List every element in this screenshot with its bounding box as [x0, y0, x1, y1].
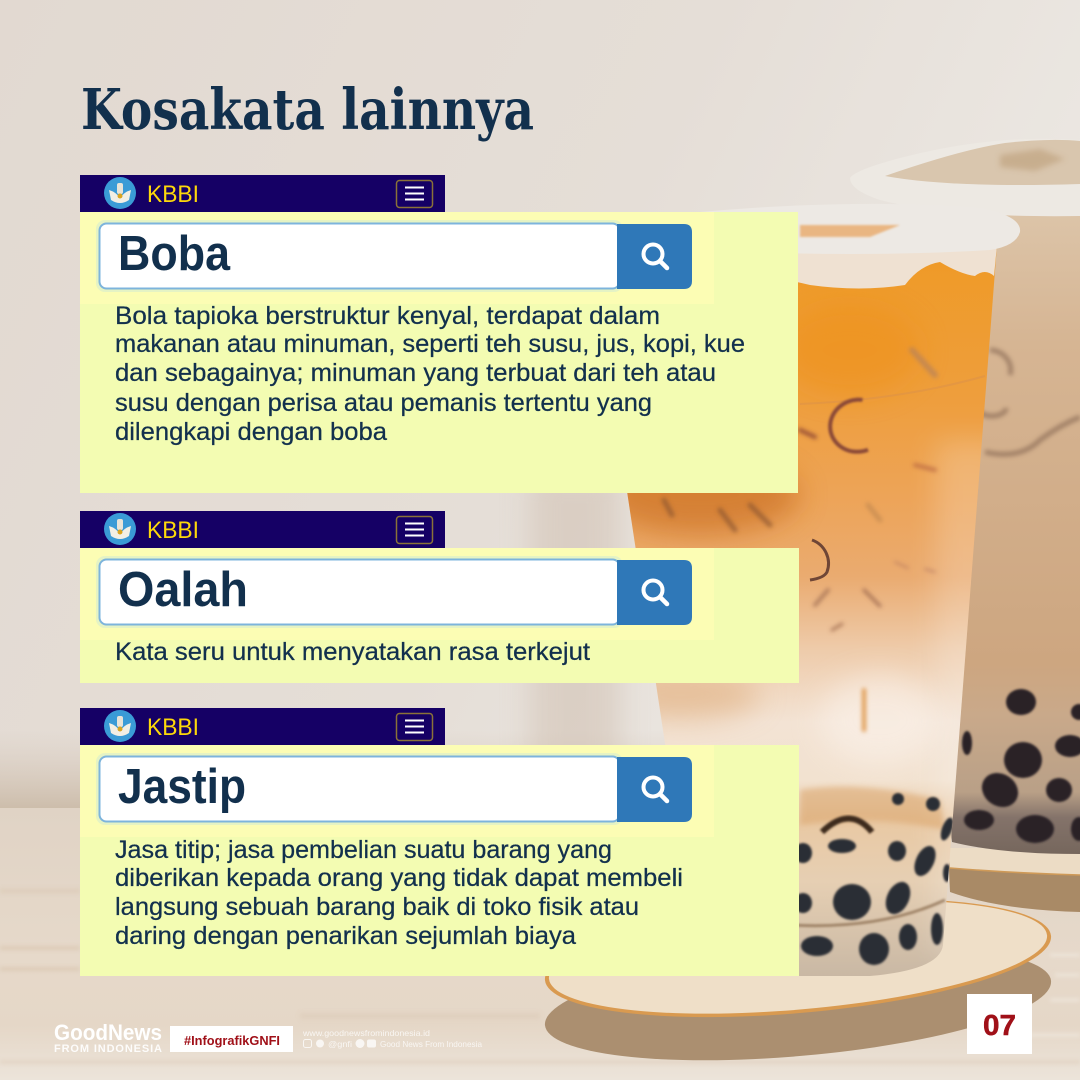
panel: Oalah [80, 511, 799, 683]
search box: Oalah [118, 563, 248, 617]
definition text: langsung sebuah barang baik di toko fisik atau [115, 893, 639, 921]
front coaster [540, 881, 1056, 1078]
definition text [115, 836, 683, 950]
page number badge [967, 994, 1032, 1054]
definition text: diberikan kepada orang yang tidak dapat membeli [115, 864, 683, 892]
definition text: makanan atau minuman, seperti teh susu, jus, kopi, kue [115, 330, 745, 358]
KBBI header bar [80, 708, 445, 745]
definition text: Kata seru untuk menyatakan rasa terkejut [115, 638, 590, 666]
search box [96, 220, 692, 292]
search box [96, 556, 692, 628]
page number badge: 07 [983, 1010, 1016, 1042]
definition text: dilengkapi dengan boba [115, 418, 387, 446]
website and social: Good News From Indonesia [380, 1039, 482, 1049]
website and social: @gnfi [328, 1039, 352, 1049]
GoodNews logo [54, 1020, 162, 1055]
definition text: daring dengan penarikan sejumlah biaya [115, 922, 576, 950]
search box: Boba [118, 227, 231, 281]
cup lid and foam [600, 204, 1020, 288]
hashtag label: #InfografikGNFI [184, 1034, 280, 1048]
footer branding [54, 1020, 482, 1055]
GoodNews logo: FROM INDONESIA [54, 1043, 162, 1055]
search box [96, 753, 692, 825]
KBBI header bar [80, 175, 445, 212]
definition text: Bola tapioka berstruktur kenyal, terdapat dalam [115, 302, 660, 330]
front cup [627, 205, 1020, 976]
search box: Jastip [118, 760, 246, 814]
hashtag label [170, 1026, 293, 1052]
website and social [302, 1028, 482, 1049]
definition text: susu dengan perisa atau pemanis tertentu yang [115, 389, 652, 417]
KBBI header bar: KBBI [147, 517, 199, 544]
definition text: Jasa titip; jasa pembelian suatu barang yang [115, 836, 612, 864]
website and social: www.goodnewsfromindonesia.id [302, 1028, 430, 1038]
panel: Jastip [80, 708, 799, 976]
panel: Boba [80, 175, 798, 493]
KBBI header bar: KBBI [147, 714, 199, 741]
back cup [850, 139, 1080, 854]
KBBI header bar: KBBI [147, 181, 199, 208]
KBBI header bar [80, 511, 445, 548]
title: Kosakata lainnya [81, 77, 534, 143]
definition text: dan sebagainya; minuman yang terbuat dari teh atau [115, 359, 716, 387]
GoodNews logo: GoodNews [54, 1020, 162, 1045]
definition text [115, 302, 745, 446]
back coaster [948, 848, 1080, 912]
